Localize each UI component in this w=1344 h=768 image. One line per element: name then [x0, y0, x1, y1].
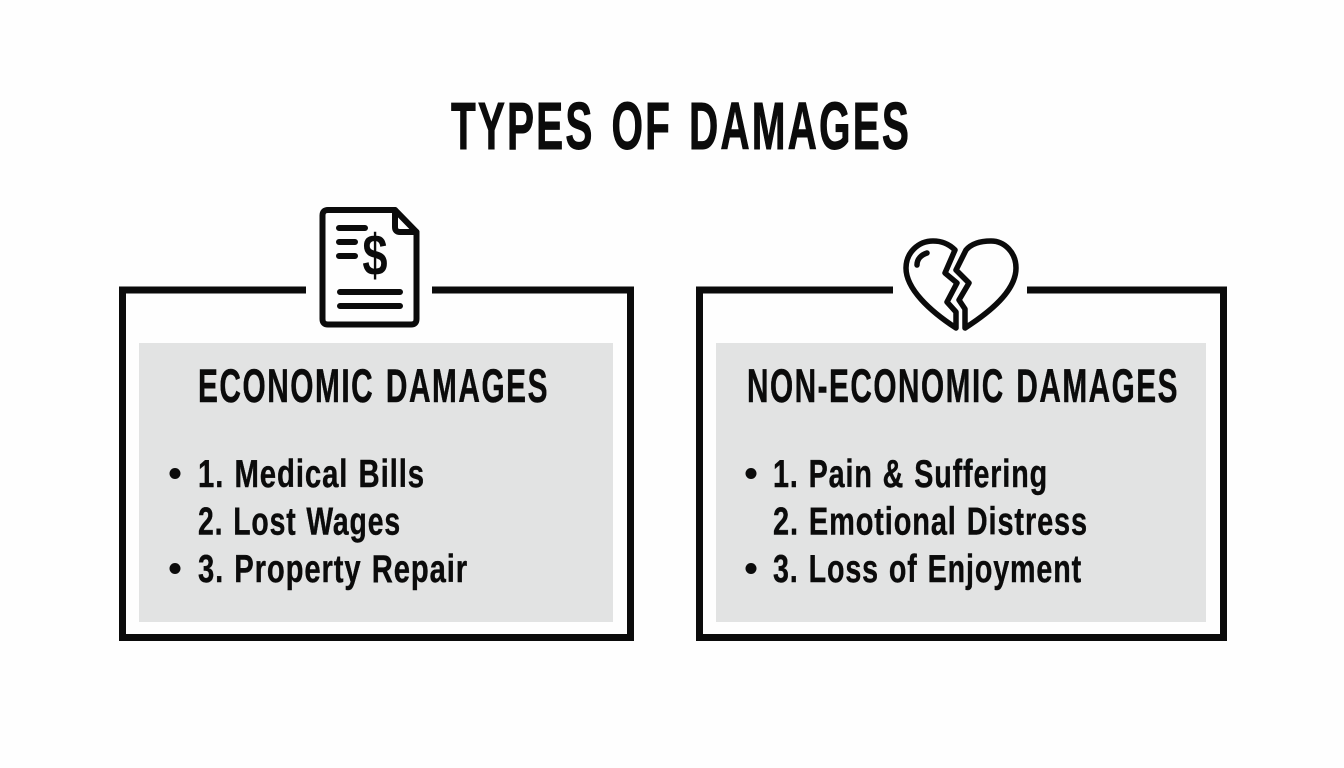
item: pain and suffering: 1. Pain & Suffering [773, 453, 1048, 496]
item: loss of enjoyment: 3. Loss of Enjoyment [773, 548, 1082, 591]
icon: broken heart [906, 241, 1016, 328]
bullet 3 [746, 563, 756, 574]
bullet 1 [170, 468, 180, 479]
heading: economic damages: ECONOMIC DAMAGES [198, 359, 549, 412]
panel: economic damages [122, 210, 630, 638]
item: emotional distress: 2. Emotional Distress [773, 500, 1088, 544]
panel frame: economic [122, 290, 630, 638]
bullet 1 [746, 468, 756, 479]
panel: non-economic damages [700, 241, 1224, 638]
item: property repair: 3. Property Repair [198, 548, 468, 591]
list: non-economic damages [746, 453, 1088, 591]
panel fill: economic [139, 343, 613, 622]
panel fill: non-economic [716, 343, 1206, 622]
item: medical bills: 1. Medical Bills [198, 453, 425, 496]
item: lost wages: 2. Lost Wages [198, 500, 401, 544]
icon: invoice document with dollar sign: $ [362, 224, 388, 288]
title: TYPES OF DAMAGES [451, 89, 911, 164]
bullet 3 [170, 563, 180, 574]
icon: invoice document with dollar sign [322, 210, 416, 324]
list: economic damages [170, 453, 468, 591]
panel frame: non-economic [700, 290, 1224, 638]
